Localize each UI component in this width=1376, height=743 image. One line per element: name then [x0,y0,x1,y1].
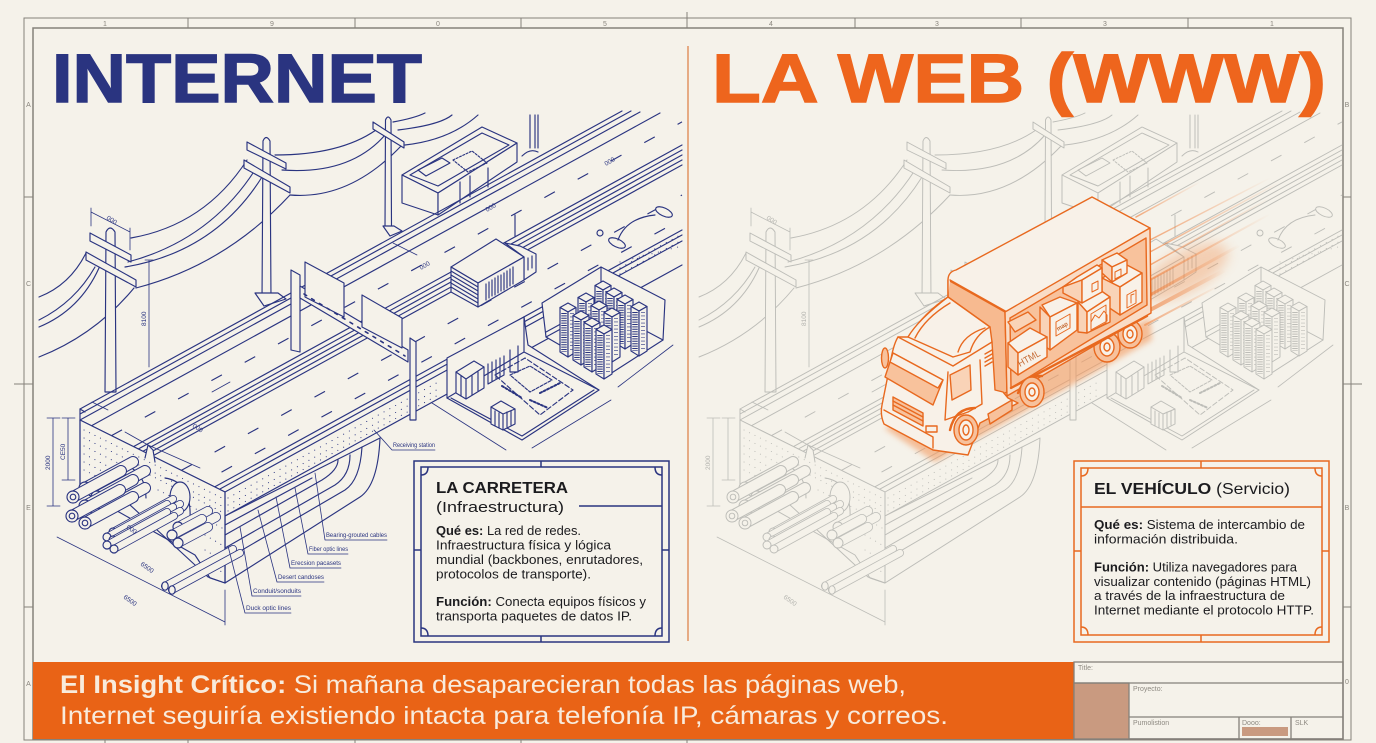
faded dimension labels: 8100 [801,311,808,326]
colour swatch [1074,683,1129,739]
rear wheels [1094,320,1142,362]
drawing frame with zone ticks: 1 [103,21,107,28]
dimension and part labels: 000 [191,423,204,435]
title block labels [1078,665,1309,727]
dimension and part labels: 000 [604,156,617,168]
roadside fittings [597,205,674,250]
panel text: visualizar contenido (páginas HTML) [1094,574,1311,589]
small swatch [1242,727,1288,736]
box label html: HTML [1016,348,1042,370]
road deck lines [80,111,682,516]
panel text: LA CARRETERA [436,480,568,497]
front wheels [950,376,1044,445]
panel text: transporta paquetes de datos IP. [436,608,632,624]
dimension and part labels: Bearing-grouted cables [326,532,388,539]
roadside building [402,115,538,215]
insight text: Internet seguiría existiendo intacta para telefonía IP, cámaras y correos. [60,702,948,730]
illustration: faded road infrastructure in grey [699,111,1342,625]
dimension and part labels: Receiving station [393,442,435,449]
cable bundles [66,462,240,594]
leader lines and callouts [228,430,435,613]
drawing frame with zone ticks: 9 [270,21,274,28]
road deck median kerb [145,445,155,462]
drawing frame with zone ticks: A [26,681,31,688]
illustration: road infrastructure in blue [39,111,682,625]
panel text: a través de la infraestructura de [1094,588,1285,603]
panel: la carretera [414,461,669,642]
title block [1074,662,1343,739]
dimension and part labels: Erecsion pacasets [291,560,342,567]
drawing frame with zone ticks: B [1345,505,1350,512]
dimension and part labels: 2000 [45,455,52,470]
panel text: Función: Conecta equipos físicos y [436,594,647,609]
dimension and part labels: Fiber optic lines [309,546,349,553]
drawing frame with zone ticks: B [1345,102,1350,109]
dimension and part labels: 000 [418,260,432,272]
panel text: información distribuida. [1094,532,1238,546]
drawing frame with zone ticks: C [26,281,31,288]
title block labels: Dooo: [1242,720,1261,727]
overhead wires [39,113,478,357]
highlighted truck [881,197,1152,462]
drawing frame with zone ticks: A [26,102,31,109]
speed trails behind truck [1133,178,1280,325]
drawing frame with zone ticks: C [1344,281,1350,288]
dimension and part labels: 8100 [141,311,148,326]
equipment room [447,317,599,440]
cab [881,297,1018,455]
cargo boxes [1008,253,1142,375]
faded dimension labels: 6500 [782,594,798,608]
drawing frame with zone ticks: 0 [436,21,440,28]
utility poles [86,117,404,392]
trailer [948,197,1151,396]
insight text: El Insight Crítico: Si mañana desaparecieran todas las páginas web, [60,671,906,699]
panel text [436,480,647,624]
title block labels: SLK [1295,720,1309,727]
insight text [60,671,948,730]
panel text: EL VEHÍCULO (Servicio) [1094,479,1290,498]
panel text: Internet mediante el protocolo HTTP. [1094,602,1314,618]
panel text: Qué es: La red de redes. [436,523,581,538]
dimension and part labels: 6500 [122,594,138,608]
insight banner [33,662,1074,739]
drawing frame with zone ticks: 4 [769,21,773,28]
faded dimension labels: 2000 [705,455,712,470]
drawing frame with zone ticks: 3 [935,21,939,28]
title block labels: Proyecto: [1133,686,1163,693]
server room [542,267,665,379]
panel frame [414,461,669,642]
faded dimension labels [705,215,808,608]
dimension and part labels [45,156,617,612]
cut face of road [80,409,225,583]
panel text: Qué es: Sistema de intercambio de [1094,517,1305,532]
drawing frame with zone ticks: 5 [603,21,607,28]
title block labels: Pumolistion [1133,720,1169,727]
title: INTERNET: INTERNET [52,40,422,117]
concrete band speckle [228,234,682,511]
panel: el vehiculo [1074,461,1329,642]
dimension lines [47,208,673,625]
drawing frame with zone ticks: 3 [1103,21,1107,28]
dimension and part labels: Conduit/sonduits [253,588,302,595]
dimension and part labels: 000 [125,524,138,536]
box icons [1056,269,1136,336]
trench conduits [225,438,380,583]
panel frame [1074,461,1329,642]
dimension and part labels: Duck optic lines [246,605,292,612]
gantry and signs [291,262,416,420]
faded dimension labels: 000 [765,215,778,227]
box label map: map [1056,321,1070,333]
center divider [687,46,689,641]
dimension and part labels: Desert candoses [278,574,325,581]
title block labels: Title: [1078,665,1093,672]
drawing frame with zone ticks: 0 [1345,679,1349,686]
title: LA WEB (WWW): LA WEB (WWW) [712,40,1326,117]
panel text: Función: Utiliza navegadores para [1094,560,1298,574]
dimension and part labels: 000 [484,202,498,214]
dimension and part labels: 6500 [139,561,155,575]
container truck on road [451,239,536,307]
drawing frame with zone ticks: 1 [1270,21,1274,28]
truck glow shadow [884,318,1152,462]
drawing frame with zone ticks: E [26,505,31,512]
panel text: (Infraestructura) [436,499,564,516]
panel text: protocolos de transporte). [436,566,591,582]
panel text: Infraestructura física y lógica [436,538,612,552]
dimension and part labels: CE50 [60,443,67,460]
panel text [1094,479,1314,618]
panel text: mundial (backbones, enrutadores, [436,552,643,567]
dimension and part labels: 000 [105,215,118,227]
